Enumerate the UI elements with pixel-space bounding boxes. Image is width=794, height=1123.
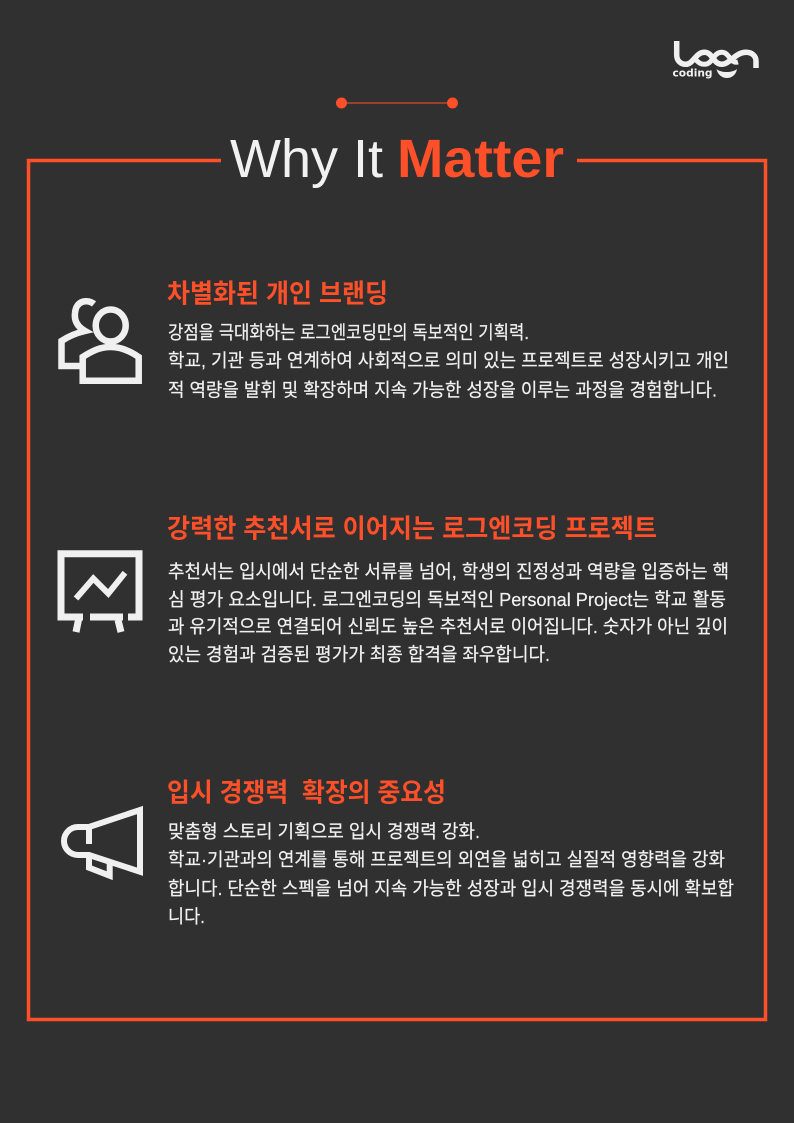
text block: recommendation bbox=[168, 561, 729, 665]
title: Matter bbox=[397, 129, 564, 189]
logo: coding bbox=[672, 68, 712, 80]
text block: admissions competitiveness: 학교·기관과의 연계를 통해 프로젝트의 외연을 넓히고 실질적 영향력을 강화 bbox=[168, 849, 725, 870]
text block: recommendation: 추천서는 입시에서 단순한 서류를 넘어, 학생의 진정성과 역량을 입증하는 핵 bbox=[168, 561, 729, 582]
title: Why It bbox=[230, 129, 383, 189]
logo bbox=[672, 41, 756, 80]
icon: people bbox=[62, 301, 139, 381]
text block: personal branding: 학교, 기관 등과 연계하여 사회적으로 의미 있는 프로젝트로 성장시키고 개인 bbox=[168, 350, 729, 371]
heading: admissions competitiveness: 입시 경쟁력 확장의 중요성 bbox=[167, 778, 446, 808]
text block: admissions competitiveness: 맞춤형 스토리 기획으로 입시 경쟁력 강화. bbox=[168, 821, 480, 842]
heading: personal branding: 차별화된 개인 브랜딩 bbox=[167, 278, 388, 308]
text block: personal branding: 적 역량을 발휘 및 확장하며 지속 가능한 성장을 이루는 과정을 경험합니다. bbox=[168, 380, 717, 400]
text block: admissions competitiveness: 니다. bbox=[168, 906, 205, 927]
text block: personal branding: 강점을 극대화하는 로그엔코딩만의 독보적인 기획력. bbox=[168, 322, 529, 343]
text block: recommendation: 심 평가 요소입니다. 로그엔코딩의 독보적인 Personal Project는 학교 활동 bbox=[168, 589, 726, 610]
panel frame bbox=[28, 160, 766, 1020]
heading: recommendation: 강력한 추천서로 이어지는 로그엔코딩 프로젝트 bbox=[167, 514, 657, 544]
title bbox=[230, 129, 564, 189]
text block: admissions competitiveness bbox=[168, 821, 734, 927]
icon: presentation board bbox=[61, 554, 139, 632]
icon: megaphone bbox=[64, 810, 140, 876]
text block: recommendation: 과 유기적으로 연결되어 신뢰도 높은 추천서로 이어집니다. 숫자가 아닌 깊이 bbox=[168, 616, 728, 637]
text block: recommendation: 있는 경험과 검증된 평가가 최종 합격을 좌우합니다. bbox=[168, 644, 550, 665]
text block: admissions competitiveness: 합니다. 단순한 스펙을 넘어 지속 가능한 성장과 입시 경쟁력을 동시에 확보합 bbox=[168, 878, 734, 899]
text block: personal branding bbox=[168, 322, 729, 400]
top connector ornament bbox=[336, 98, 458, 108]
